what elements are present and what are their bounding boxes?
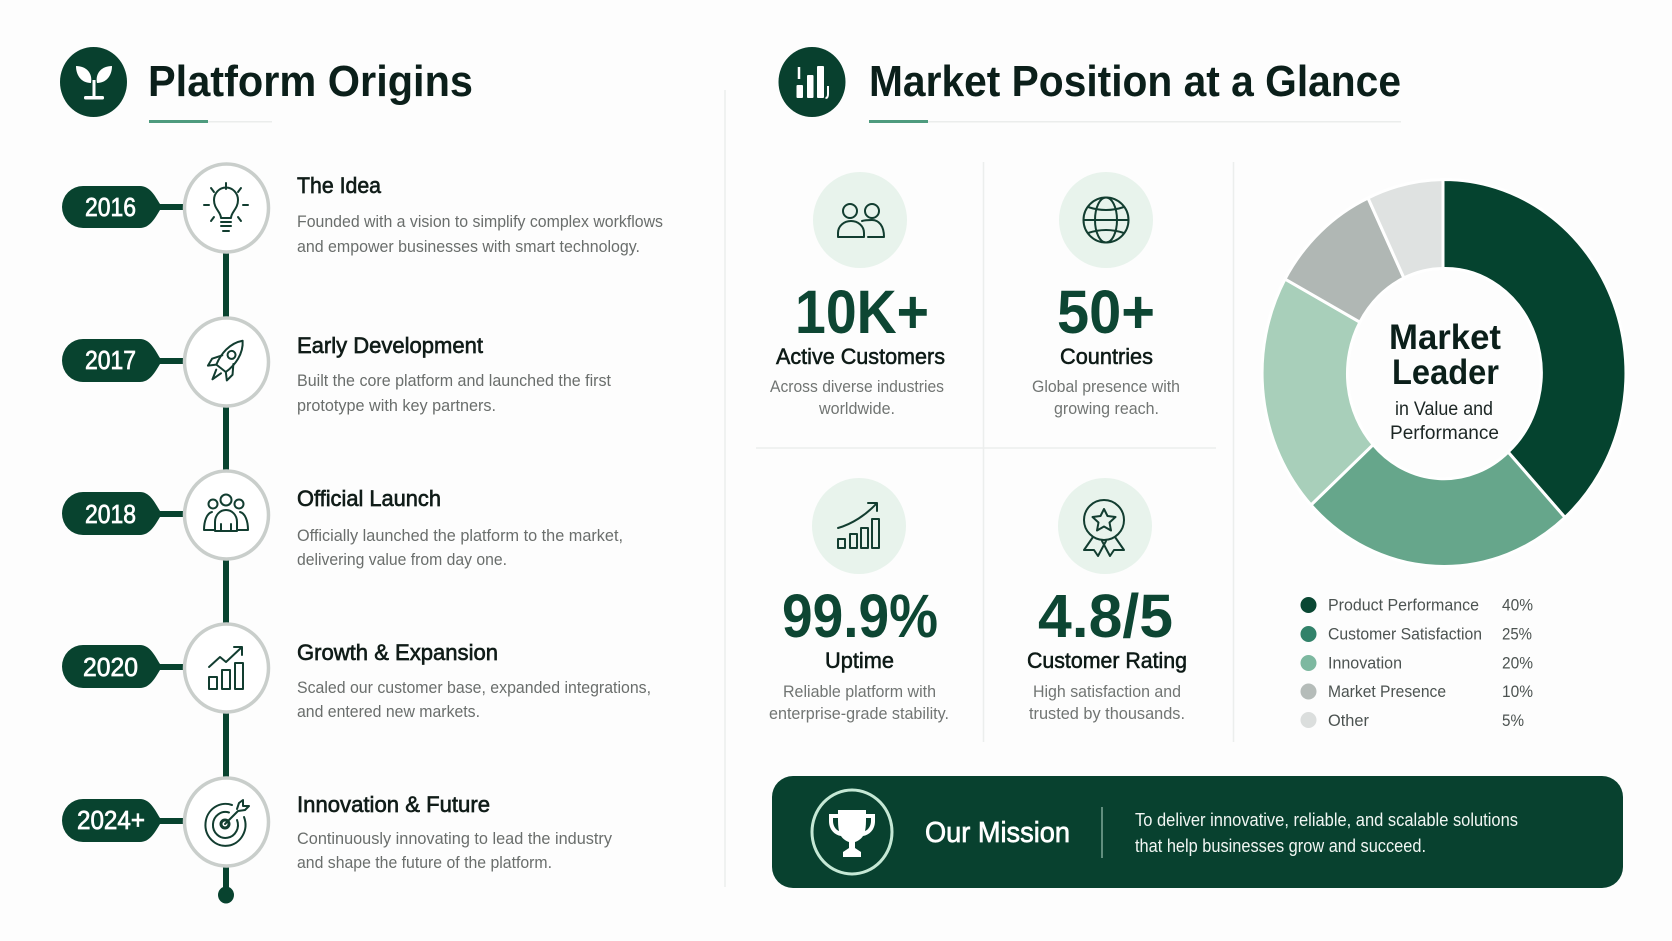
stat: active customers: Across diverse industries: [770, 377, 944, 396]
title: market position at a glance: Market Position at a Glance: [869, 57, 1401, 106]
donut centre label: Market: [1389, 318, 1501, 357]
legend item: innovation: [1300, 654, 1533, 672]
mission banner: [772, 776, 1623, 888]
stat: countries: Countries: [1060, 344, 1153, 369]
text: early development: Built the core platform and launched the first: [297, 372, 611, 390]
icon: customers: [813, 172, 907, 268]
stat: customer rating: trusted by thousands.: [1029, 704, 1185, 723]
text: early development: Early Development: [297, 333, 484, 358]
icon: sprout badge: [60, 47, 127, 117]
text: early development: prototype with key partners.: [297, 397, 496, 415]
legend item: customer satisfaction: Customer Satisfaction: [1328, 624, 1482, 644]
stat: active customers: Active Customers: [776, 344, 945, 369]
stat: customer rating: Customer Rating: [1027, 648, 1187, 673]
text: the idea: Founded with a vision to simplify complex workflows: [297, 213, 663, 231]
legend item: innovation: Innovation: [1328, 654, 1402, 672]
stat: countries: 50+: [1057, 278, 1155, 346]
legend item: market presence: Market Presence: [1328, 682, 1446, 701]
icon: bars badge: [778, 47, 846, 117]
text: growth and expansion: and entered new markets.: [297, 703, 480, 721]
year pill: 2020: [62, 645, 185, 688]
stat: countries: Global presence with: [1032, 377, 1180, 396]
legend item: product performance: Product Performance: [1328, 596, 1479, 614]
legend item: other: 5%: [1502, 711, 1524, 730]
year pill: 2017: [62, 339, 185, 382]
text: early development: [297, 333, 611, 415]
year pill: 2018: 2018: [85, 501, 136, 529]
stat: customer rating: 4.8/5: [1038, 582, 1173, 650]
mission text: [1135, 810, 1518, 856]
text: official launch: [297, 486, 623, 569]
text: official launch: Officially launched the platform to the market,: [297, 527, 623, 545]
text: growth and expansion: Growth & Expansion: [297, 640, 498, 665]
year pill: 2024+: 2024+: [77, 807, 145, 835]
stat: uptime: Reliable platform with: [783, 682, 936, 701]
icon: globe: [1059, 172, 1153, 268]
donut centre label: in Value and: [1395, 399, 1493, 420]
icon: target: [205, 800, 249, 846]
timeline item: 2017: [62, 318, 611, 415]
mission heading: Our Mission: [925, 817, 1070, 849]
year pill: 2017: 2017: [85, 347, 136, 375]
donut centre label: Performance: [1390, 423, 1499, 444]
icon: growth chart: [209, 647, 243, 689]
heading underline: [149, 120, 272, 123]
year pill: 2016: [62, 186, 185, 228]
text: official launch: Official Launch: [297, 486, 441, 511]
timeline item: 2018: [62, 471, 623, 569]
title: platform origins: Platform Origins: [148, 57, 473, 106]
text: growth and expansion: Scaled our customer base, expanded integrations,: [297, 679, 651, 697]
timeline spine: [218, 250, 234, 904]
text: innovation and future: Continuously innovating to lead the industry: [297, 830, 613, 848]
stat: active customers: 10K+: [795, 278, 929, 346]
stat: uptime: enterprise-grade stability.: [769, 704, 949, 723]
heading underline: [869, 120, 1401, 123]
text: innovation and future: Innovation & Future: [297, 792, 490, 817]
stat: uptime: 99.9%: [782, 582, 938, 650]
icon: uptime chart: [812, 478, 906, 574]
panel: platform origins: [60, 47, 663, 904]
stat: countries: growing reach.: [1054, 399, 1159, 418]
year pill: 2020: 2020: [83, 654, 138, 682]
legend: [1300, 596, 1533, 730]
legend item: innovation: 20%: [1502, 654, 1533, 672]
legend item: customer satisfaction: 25%: [1502, 624, 1532, 644]
stat: active customers: [770, 172, 945, 418]
donut centre label: Leader: [1392, 353, 1499, 392]
year pill: 2018: [62, 492, 185, 535]
legend item: market presence: 10%: [1502, 682, 1533, 701]
stat: uptime: Uptime: [825, 648, 894, 673]
heading: market position: [778, 47, 1401, 123]
text: official launch: delivering value from day one.: [297, 551, 507, 569]
mission text: that help businesses grow and succeed.: [1135, 836, 1426, 856]
legend item: other: Other: [1328, 711, 1369, 730]
text: the idea: [297, 173, 663, 256]
mission text: To deliver innovative, reliable, and scalable solutions: [1135, 810, 1518, 830]
text: innovation and future: [297, 792, 613, 872]
stat: customer rating: High satisfaction and: [1033, 682, 1181, 701]
donut centre label: [1389, 318, 1501, 444]
text: growth and expansion: [297, 640, 651, 721]
icon: light bulb: [204, 183, 248, 231]
icon: team: [204, 494, 248, 531]
icon: trophy: [812, 790, 892, 874]
legend item: product performance: [1300, 596, 1533, 614]
timeline item: 2016: [62, 164, 663, 256]
donut chart: market leader: [1262, 179, 1626, 566]
legend item: market presence: [1300, 682, 1533, 701]
legend item: other: [1300, 711, 1524, 730]
stat: countries: [1032, 172, 1180, 418]
stat: uptime: [769, 478, 949, 723]
stat: customer rating: [1027, 478, 1187, 723]
icon: rocket: [202, 333, 253, 387]
timeline item: 2024+: [62, 778, 613, 872]
icon: award medal: [1058, 478, 1152, 574]
timeline item: 2020: [62, 624, 651, 721]
text: the idea: The Idea: [297, 173, 381, 198]
text: innovation and future: and shape the future of the platform.: [297, 854, 552, 872]
year pill: 2016: 2016: [85, 194, 136, 222]
year pill: 2024+: [62, 799, 185, 842]
stat: active customers: worldwide.: [818, 399, 895, 418]
text: the idea: and empower businesses with smart technology.: [297, 238, 640, 256]
heading: platform origins: [60, 47, 473, 123]
legend item: product performance: 40%: [1502, 596, 1533, 614]
panel: market position: [756, 47, 1626, 888]
